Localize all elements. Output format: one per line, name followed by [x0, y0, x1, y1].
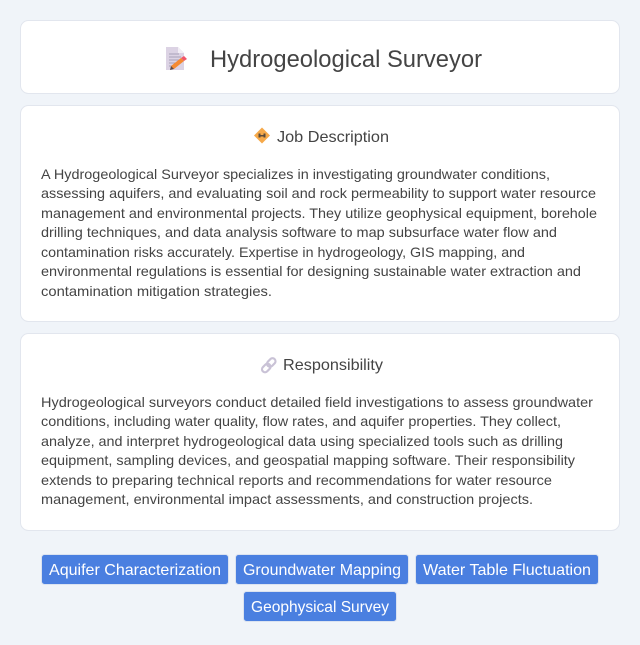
tag: geophysical survey: [244, 592, 396, 622]
title: Hydrogeological Surveyor: [210, 46, 482, 73]
text block: job description: contamination mitigation strategies.: [41, 283, 272, 299]
panel: title header: [20, 20, 620, 94]
tag: groundwater mapping: [236, 554, 408, 584]
heading: job description: Job Description: [277, 129, 389, 146]
text block: job description: assessing aquifers, and evaluating soil and rock permeability to support water resource: [41, 185, 596, 201]
text block: responsibility: analyze, and interpret hydrogeological data using specialized tools such as drilling: [41, 433, 563, 449]
text block: job description: management and environmental projects. They utilize geophysical equipment, borehole: [41, 205, 597, 221]
tag: aquifer characterization: Aquifer Characterization: [49, 562, 221, 579]
text block: responsibility: management, environmental impact assessments, and construction projects.: [41, 491, 533, 507]
text block: responsibility: equipment, sampling devices, and geospatial mapping software. Their responsibility: [41, 452, 575, 468]
text block: responsibility: Hydrogeological surveyors conduct detailed field investigations to assess groundwater: [41, 394, 593, 410]
icon: document with pencil: [166, 47, 187, 70]
text block: job description: [41, 166, 597, 299]
tag: water table fluctuation: [416, 554, 598, 584]
heading: responsibility: Responsibility: [283, 357, 383, 374]
icon: chain link: [261, 357, 277, 373]
tag: geophysical survey: Geophysical Survey: [251, 599, 389, 616]
tag: groundwater mapping: Groundwater Mapping: [243, 562, 401, 579]
text block: responsibility: conditions, including water quality, flow rates, and aquifer properties. They collect,: [41, 413, 561, 429]
text block: responsibility: extends to preparing technical reports and recommendations for water resource: [41, 472, 552, 488]
icon: warning diamond: [254, 128, 270, 144]
text block: job description: A Hydrogeological Surveyor specializes in investigating groundwater conditions,: [41, 166, 550, 182]
panel: job description: [20, 106, 620, 322]
tag: aquifer characterization: [42, 554, 228, 584]
text block: job description: contamination risks accurately. Expertise in hydrogeology, GIS mapping, and: [41, 244, 525, 260]
panel: responsibility: [20, 334, 620, 530]
text block: job description: drilling techniques, and data analysis software to map subsurface water flow and: [41, 224, 557, 240]
tag: water table fluctuation: Water Table Fluctuation: [423, 562, 591, 579]
text block: responsibility: [41, 394, 593, 507]
text block: job description: environmental regulations is essential for designing sustainable water extraction and: [41, 263, 581, 279]
